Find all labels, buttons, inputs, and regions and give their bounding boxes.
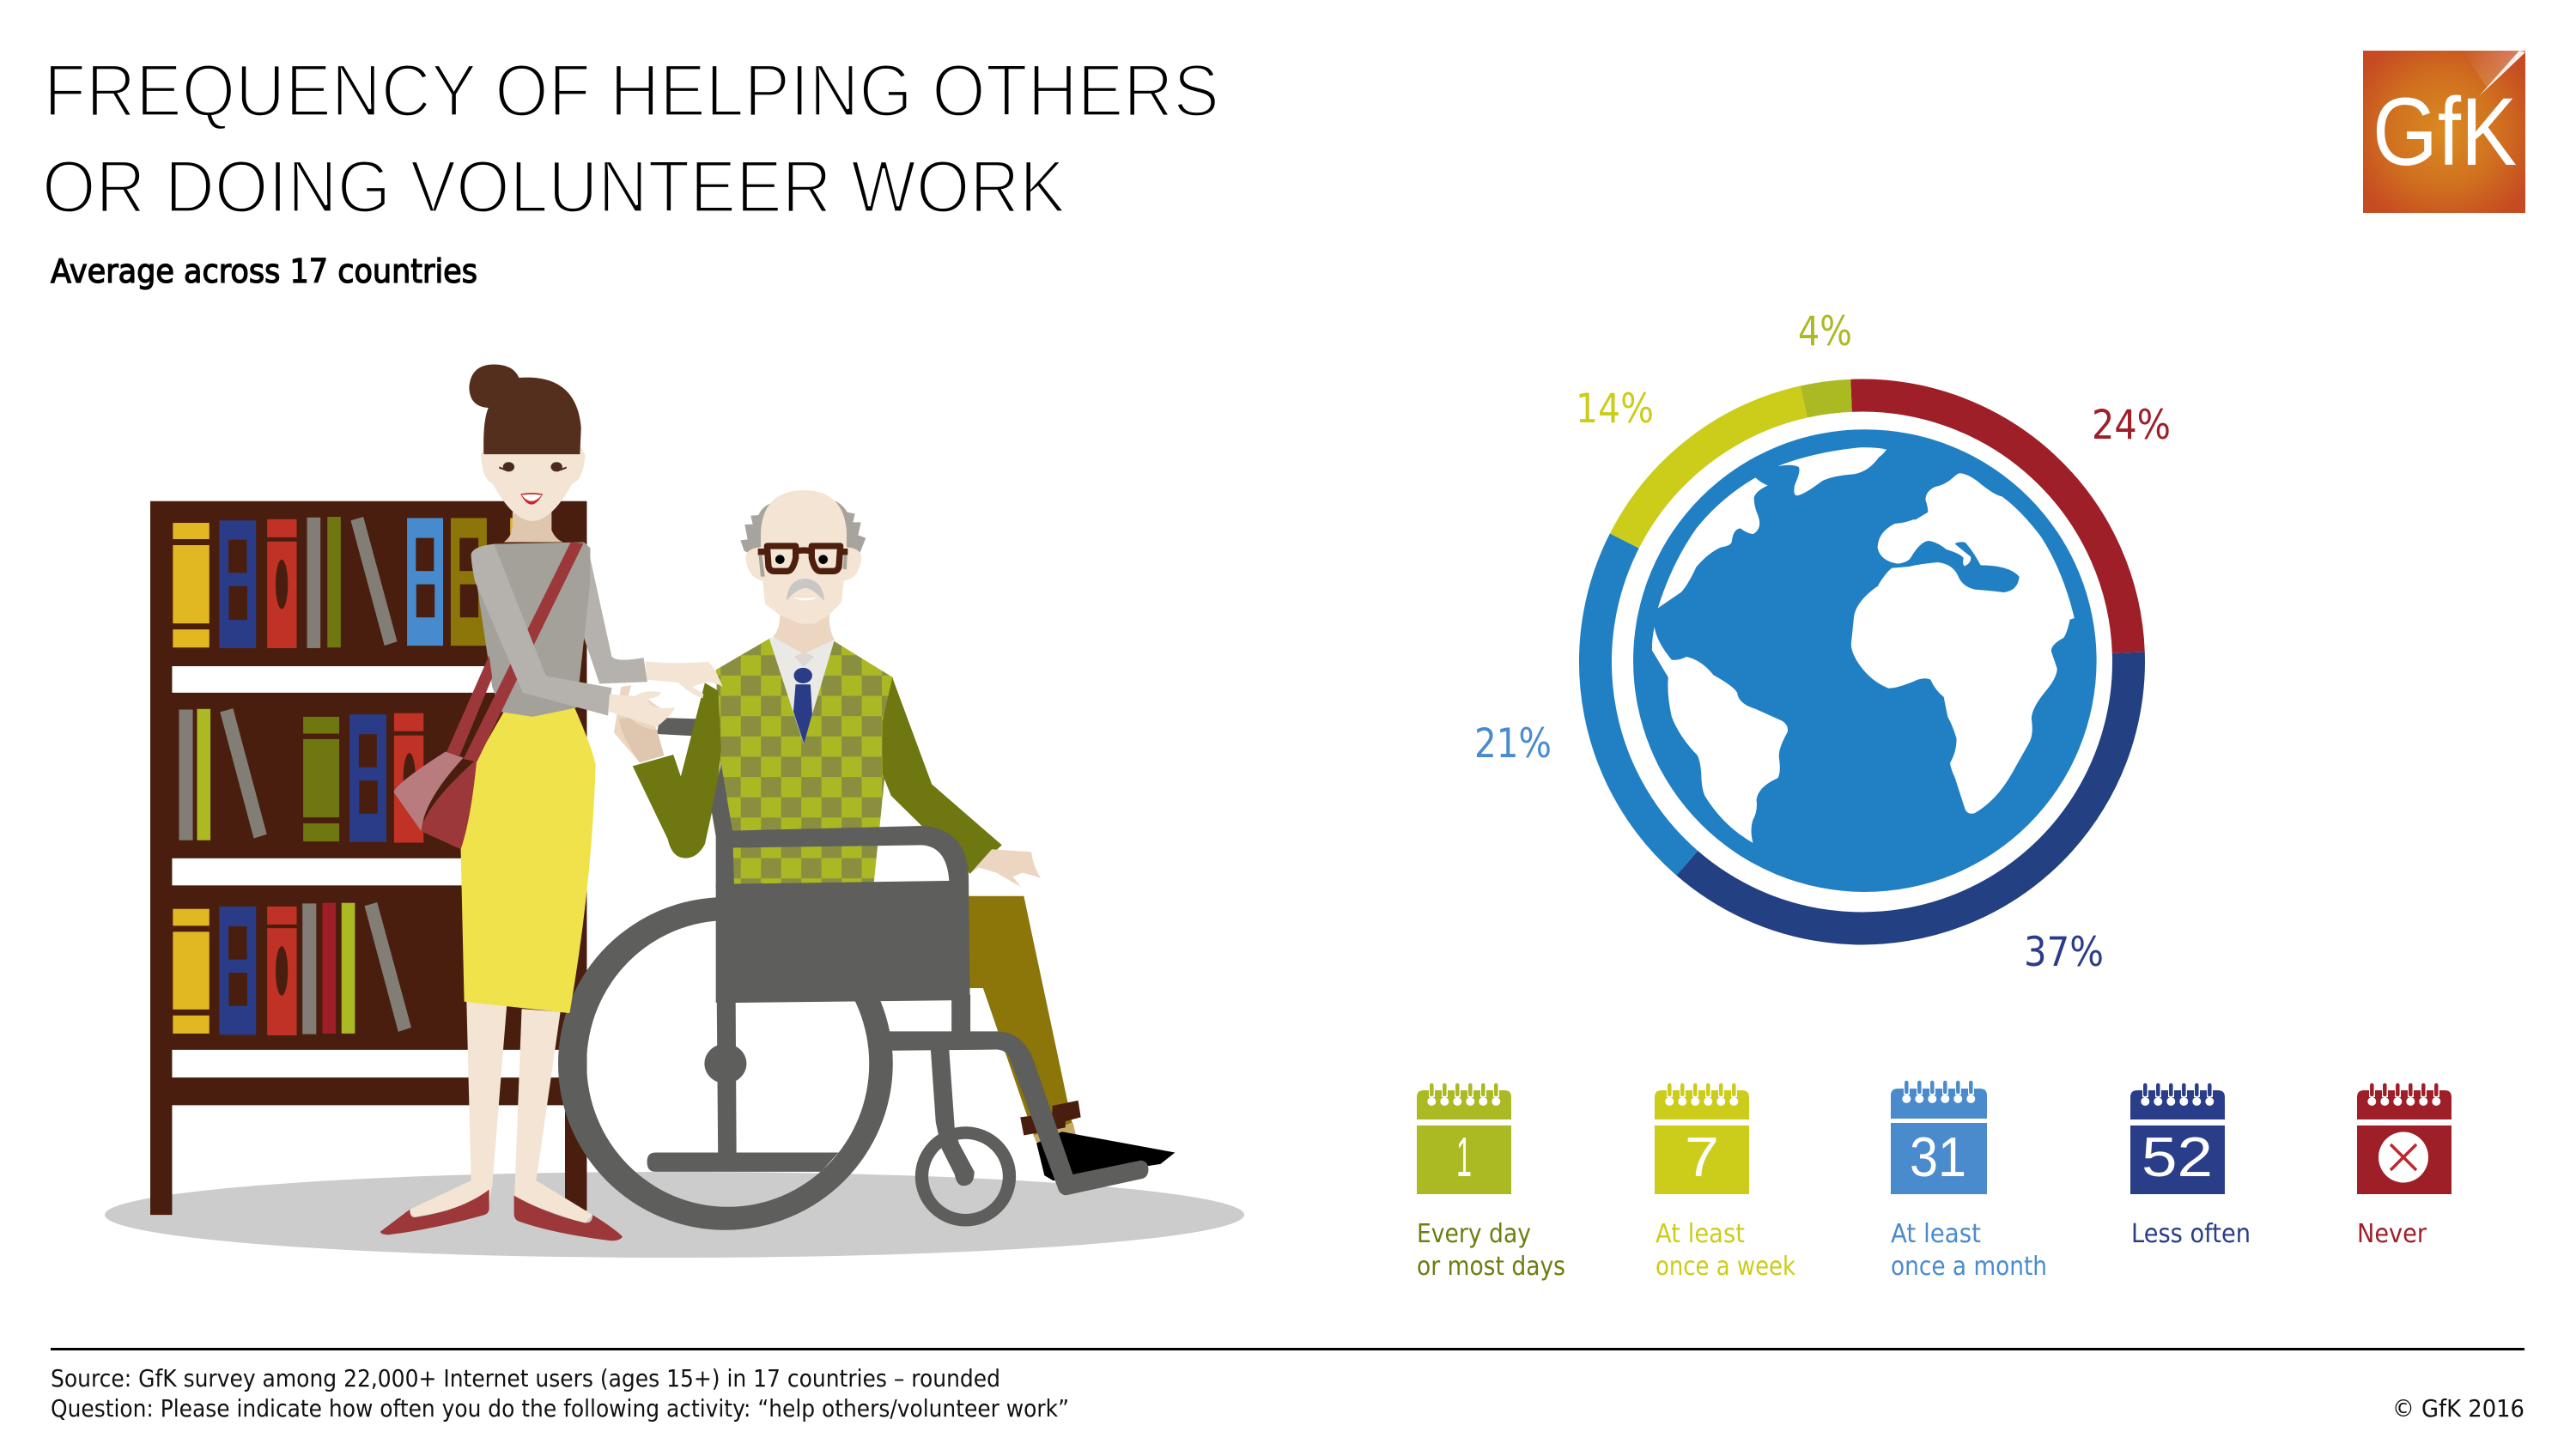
legend: every day or most days [1417, 1085, 1565, 1282]
wheelchair handle and man's left hand [614, 685, 698, 762]
trousers and shoe [968, 896, 1175, 1180]
handbag [393, 655, 492, 849]
neck and head [469, 365, 586, 542]
value labels: 21% [1474, 720, 1552, 767]
sleeves [633, 677, 1002, 874]
illustration: woman helping man in wheelchair [105, 365, 1244, 1258]
subtitle: Average across 17 countries [51, 252, 477, 290]
globe [1633, 429, 2097, 892]
ring segment: at least once a week 14% [1625, 402, 1804, 541]
value labels: 14% [1576, 385, 1654, 433]
right hand [970, 849, 1041, 888]
legend: at least once a week: 7 [1685, 1125, 1719, 1188]
sweater [464, 542, 647, 762]
legend: less often: Less often [2131, 1219, 2251, 1249]
logo: GfK [2363, 51, 2525, 213]
woman's hands [608, 662, 723, 727]
legend: at least once a week: once a week [1656, 1252, 1796, 1282]
footer source note: Question: Please indicate how often you do the following activity: “help others/volunteer work” [51, 1394, 1069, 1423]
legend: less often [2130, 1085, 2251, 1249]
value labels: 37% [2024, 929, 2104, 976]
legs and shoes [380, 1000, 623, 1241]
bookshelf with books [150, 501, 586, 1215]
ring segment: at least once a month 21% [1595, 541, 1687, 863]
skirt [461, 707, 596, 1013]
legend: every day or most days: or most days [1417, 1252, 1565, 1282]
legend: every day or most days: Every day [1417, 1219, 1531, 1249]
legend: at least once a month [1891, 1083, 2047, 1282]
legend: never [2357, 1085, 2451, 1249]
legend: every day or most days: 1 [1456, 1125, 1472, 1188]
legend: less often: 52 [2142, 1125, 2213, 1188]
woman [380, 365, 647, 1241]
wheelchair [558, 763, 1148, 1230]
ring segment: every day 4% [1804, 396, 1851, 402]
ring segment: never 24% [1851, 396, 2129, 652]
ring segment: less often 37% [1687, 652, 2129, 928]
legend: at least once a week [1655, 1085, 1796, 1282]
legend: at least once a week: At least [1656, 1219, 1745, 1249]
footer source note: Source: GfK survey among 22,000+ Internet users (ages 15+) in 17 countries – rounded [51, 1364, 1000, 1392]
man in wheelchair [558, 490, 1175, 1230]
shirt and vest [716, 638, 893, 886]
footer source note [51, 1364, 1069, 1423]
donut chart with globe [1474, 308, 2171, 976]
Mediterranean sea [1863, 515, 2020, 592]
legend: at least once a month: 31 [1910, 1125, 1966, 1188]
logo: GfK: GfK [2372, 78, 2517, 185]
legend: at least once a month: At least [1891, 1219, 1981, 1249]
value labels [1474, 308, 2171, 976]
title: OR DOING VOLUNTEER WORK [42, 146, 1066, 228]
head [740, 490, 866, 667]
value labels: 24% [2092, 402, 2171, 449]
floor shadow [105, 1172, 1244, 1258]
copyright: © GfK 2016 [2392, 1394, 2524, 1423]
title [42, 50, 1219, 228]
legend: never: Never [2357, 1219, 2427, 1249]
value labels: 4% [1798, 308, 1852, 355]
title: FREQUENCY OF HELPING OTHERS [44, 50, 1219, 132]
legend: at least once a month: once a month [1891, 1252, 2047, 1282]
